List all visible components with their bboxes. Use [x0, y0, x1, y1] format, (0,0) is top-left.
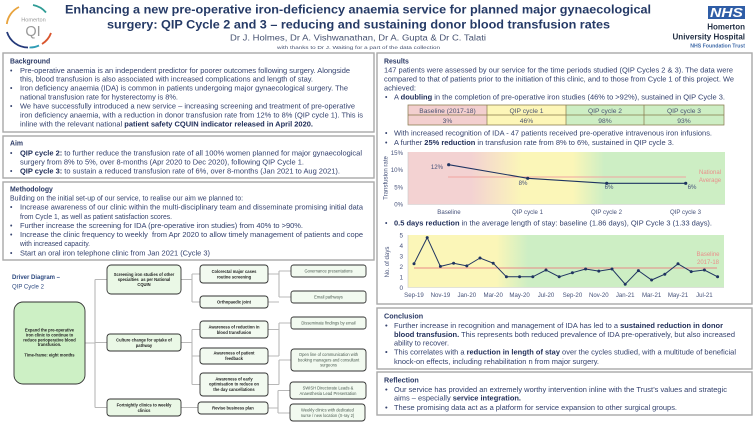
chart: length of stay: 5: [399, 232, 403, 240]
panel: reflection: [377, 372, 752, 415]
secondary driver: business plan: [198, 402, 268, 414]
logo: NHS Homerton University Hospital: University Hospital: [673, 32, 745, 41]
panel: background: iron deficiency anaemia, with a reduction in donor transfusion rate from 12% to 8% (QIP cycle 1). This is: [20, 112, 364, 119]
chart: transfusion rate: Baseline: [437, 209, 461, 216]
logo: NHS Homerton University Hospital: NHS: [710, 6, 744, 20]
length of stay line: [412, 236, 719, 286]
chart: transfusion rate: 6%: [605, 184, 614, 191]
panel: results: achieved:: [384, 86, 416, 93]
change idea: open line: booking managers and consultant: [298, 357, 360, 362]
secondary driver: business plan: Revise business plan: [212, 406, 254, 410]
change idea: disseminate: Disseminate findings by email: [301, 320, 356, 326]
panel: background: inline with the relevant national patient safety CQUIN indicator released in April 2020.: [20, 121, 313, 128]
panel: aim: surgery from 8% to 5%, over 8-months (Apr 2020 to Dec 2020), following QIP Cycle 1.: [20, 159, 304, 166]
chart: transfusion rate: [382, 150, 725, 216]
title: [65, 2, 651, 31]
chart: length of stay: No. of days: [384, 247, 391, 277]
primary driver: screening: Screening iron studies of other: [114, 272, 175, 277]
results table: 98%: [598, 118, 612, 125]
panel: conclusion: •: [385, 321, 388, 330]
chart: transfusion rate: 6%: [688, 184, 697, 191]
panel: methodology: Methodology: [10, 187, 53, 194]
driver: aim box: reduce perioperative blood: [23, 337, 76, 342]
x-axis month labels: Nov-19: [431, 292, 451, 299]
panel: methodology: from Cycle 1, as well as patient satisfaction scores.: [20, 214, 172, 221]
driver: aim box: transfusion.: [38, 342, 61, 347]
national average line: [448, 176, 686, 178]
chart: length of stay: [384, 232, 724, 299]
panel: aim: Aim: [10, 140, 23, 148]
panel: conclusion: •: [385, 348, 388, 357]
x-axis month labels: Mar-21: [642, 292, 662, 299]
chart: transfusion rate: QIP cycle 2: [591, 209, 623, 216]
chart: transfusion rate: QIP cycle 1: [512, 209, 544, 216]
change idea: open line: Open line of communication with: [299, 352, 359, 357]
panel: background: national transfusion rate for hysterectomy is 8%.: [20, 94, 178, 101]
change idea: open line: [291, 349, 366, 371]
title: surgery: QIP Cycle 2 and 3 – reducing and sustaining donor blood transfusion rates: [107, 17, 610, 31]
chart: length of stay: 0: [399, 285, 403, 292]
results table: Baseline (2017-18): [419, 108, 476, 115]
x-axis month labels: Jan-20: [457, 292, 477, 299]
panel: methodology: with increased capacity.: [19, 241, 90, 248]
change idea: open line: surgeons: [320, 363, 337, 368]
primary driver: clinic frequency: Fortnightly clinics to weekly: [117, 402, 172, 408]
panel: background: •: [10, 68, 13, 75]
panel: results: With increased recognition of IDA - 47 patients received pre-operative intravenous iron infusions.: [394, 130, 712, 138]
secondary driver: patient feedback: Awareness of patient: [213, 350, 255, 356]
chart: transfusion rate: 5%: [394, 184, 404, 191]
logo: Homerton QI: Homerton: [21, 18, 46, 24]
change idea: email: Email pathways: [314, 294, 343, 300]
x-axis month labels: Sep-19: [404, 292, 424, 299]
secondary driver: colorectal: Colorectal major cases: [212, 269, 257, 274]
logo: Homerton QI: QI: [25, 24, 41, 40]
transfusion rate line: [447, 163, 687, 185]
x-axis month labels: Sep-20: [563, 292, 583, 299]
driver diagram heading: QIP Cycle 2: [12, 284, 45, 290]
panel: results: •: [385, 94, 388, 102]
primary driver: screening: [107, 265, 181, 294]
baseline line: [414, 267, 717, 269]
results table: QIP cycle 1: [509, 108, 544, 115]
panel: aim: QIP cycle 2: to further reduce the transfusion rate of all 100% women planned for major gynaecological: [20, 150, 362, 157]
panel: conclusion: Conclusion: [384, 312, 423, 320]
logo: NHS Homerton University Hospital: Homerton: [707, 23, 745, 32]
chart: transfusion rate: 10%: [391, 167, 404, 174]
chart: transfusion rate: Transfusion rate: [382, 155, 390, 200]
secondary driver: early optimisation: the day cancellations: [213, 387, 255, 392]
chart: transfusion rate: 12%: [431, 164, 444, 171]
panel: background: Background: [10, 58, 50, 65]
logo: NHS Homerton University Hospital: NHS Foundation Trust: [690, 43, 745, 49]
panel: results: •: [385, 130, 388, 138]
panel: methodology: Building on the initial set-up of our service, to realise our aim we planned to:: [10, 196, 243, 203]
primary driver: screening: CQUIN: [137, 282, 151, 287]
x-axis month labels: Jul-20: [538, 292, 555, 299]
primary driver: culture change: Culture change for uptake of: [116, 338, 172, 342]
chart: transfusion rate: 15%: [391, 150, 404, 157]
panel: aim: •: [10, 150, 13, 157]
panel: results: A further 25% reduction in transfusion rate from 8% to 6%, sustained in QIP cycle 3.: [394, 140, 674, 147]
chart: length of stay: 2: [399, 264, 403, 271]
panel: results: Results: [384, 58, 409, 65]
results table: QIP cycle 2: [588, 108, 622, 115]
x-axis month labels: Nov-20: [589, 292, 609, 299]
panel: background: •: [10, 86, 13, 92]
secondary driver: early optimisation: [200, 373, 268, 396]
secondary driver: early optimisation: optimisation to reduce on: [209, 382, 260, 387]
chart: transfusion rate: 0%: [394, 202, 404, 209]
panel: aim: [3, 136, 374, 178]
driver diagram: [12, 265, 366, 421]
panel: methodology: Increase the clinic frequency to weekly from Apr 2020 to allow timely management of patients and cope: [20, 232, 363, 239]
panel: conclusion: This correlates with a reduction in length of stay over the cycles studied, with a multitude of beneficial: [394, 348, 736, 357]
panel: reflection: Reflection: [384, 376, 419, 385]
change idea: weekly clinics: [290, 404, 365, 421]
secondary driver: patient feedback: [200, 348, 268, 364]
panel: conclusion: [377, 308, 752, 369]
change idea: SWISH: [290, 382, 366, 399]
panel: conclusion: knock-on effects, including rehabilitation n from major surgery.: [394, 357, 599, 366]
x-axis month labels: Jan-21: [616, 292, 635, 299]
x-axis month labels: Mar-20: [484, 292, 503, 299]
driver diagram heading: Driver Diagram –: [12, 275, 61, 281]
chart: transfusion rate: National: [699, 170, 721, 176]
results table: [408, 105, 724, 125]
panel: results: •: [385, 220, 388, 228]
chart: length of stay: 2017-18: [697, 260, 720, 266]
panel: conclusion: Further increase in recognition and management of IDA has led to a sustained reduction in donor: [394, 321, 723, 330]
secondary driver: colorectal: [200, 265, 268, 283]
panel: results: •: [385, 140, 388, 147]
panel: reflection: Our service has provided an extremely worthy intervention inline with the Trust’s values and strategic: [394, 385, 727, 394]
change idea: governance: [291, 265, 366, 277]
secondary driver: colorectal: routine screening: [217, 274, 252, 280]
change idea: SWISH: SWISH Directorate Leads &: [303, 386, 354, 390]
panel: methodology: •: [10, 232, 13, 239]
panel: conclusion: blood transfusion. This represents both reduced prevalence of IDA pre-operatively, but also increased: [394, 330, 735, 339]
change idea: governance: Governance presentations: [304, 268, 353, 274]
driver diagram heading: [12, 275, 61, 290]
chart: transfusion rate: Average: [699, 178, 722, 184]
driver: aim box: iron clinic to continue to: [26, 332, 74, 337]
driver: aim box: Time-frame: eight months: [24, 352, 75, 358]
panel: background: this, blood transfusion is also associated with increased complications and length of stay.: [20, 76, 313, 84]
panel: methodology: Start an oral iron telephone clinic from Jan 2021 (Cycle 3): [20, 250, 210, 258]
driver: aim box: Expand the pre-operative: [25, 328, 75, 332]
primary driver: clinic frequency: clinics: [138, 408, 151, 413]
panel: background: Pre-operative anaemia is an independent predictor for poorer outcomes following surgery. Alongside: [20, 68, 350, 75]
panel: methodology: Further increase the screening for IDA (pre-operative iron studies) from 40% to >90%.: [20, 223, 303, 230]
panel: background: Iron deficiency anaemia (IDA) is common in patients undergoing major gynaecological surgery. The: [20, 86, 348, 92]
change idea: weekly clinics: Weekly clinics with dedicated: [301, 408, 355, 412]
change idea: disseminate: [291, 317, 366, 329]
chart: transfusion rate: 8%: [519, 180, 528, 187]
panel: conclusion: ability to recover.: [394, 339, 449, 348]
logo: Homerton QI: [7, 5, 51, 48]
change idea: SWISH: Anaesthesia Lead Presentation: [300, 391, 357, 396]
x-axis month labels: May-20: [509, 292, 530, 299]
panel: methodology: •: [10, 250, 13, 258]
panel: results: compared to that of patients prior to the initiation of this clinic, and to those from Cycle 1 of this project. We: [384, 77, 734, 84]
secondary driver: awareness of reduction: Awareness of reduction in: [208, 324, 260, 330]
x-axis month labels: Jul-21: [696, 292, 713, 299]
chart: length of stay: 1: [399, 274, 403, 281]
panel: aim: •: [10, 168, 13, 175]
panel: background: [3, 53, 374, 132]
secondary driver: orthopaedic: Orthopaedic joint: [217, 300, 252, 304]
chart: length of stay: 3: [399, 253, 403, 260]
secondary driver: patient feedback: feedback: [225, 356, 244, 361]
chart: length of stay: Baseline: [696, 252, 720, 258]
panel: results: 0.5 days reduction in the average length of stay: baseline (1.86 days), QIP Cycle 3 (1.33 days).: [394, 220, 712, 228]
secondary driver: orthopaedic: [200, 296, 268, 308]
driver: aim box: [14, 302, 85, 384]
panel: reflection: •: [385, 385, 388, 394]
primary driver: culture change: pathway: [136, 343, 153, 348]
results table: 93%: [677, 118, 691, 125]
panel: aim: QIP cycle 3: to sustain a reduced transfusion rate of 6%, over 8-months (Jan 2021 to Aug 2021).: [20, 168, 340, 175]
primary driver: screening: specialties as per National: [118, 277, 170, 282]
change idea: weekly clinics: nurse / new location (X-ray 2): [301, 413, 355, 418]
chart: transfusion rate: QIP cycle 3: [670, 209, 702, 216]
panel: reflection: •: [385, 403, 388, 412]
panel: methodology: •: [10, 223, 13, 230]
primary driver: culture change: [107, 334, 181, 351]
connectors: [85, 271, 291, 413]
x-axis month labels: [404, 292, 713, 299]
results table: 46%: [520, 118, 533, 125]
panel: methodology: Increase awareness of our clinic within the multi-disciplinary team and disseminate promising initial data: [20, 205, 363, 212]
authors: Dr J. Holmes, Dr A. Vishwanathan, Dr A. Gupta & Dr C. Talati: [230, 33, 486, 43]
primary driver: clinic frequency: [107, 399, 181, 416]
secondary driver: early optimisation: Awareness of early: [215, 376, 253, 382]
panel: reflection: aims – especially service integration.: [394, 394, 521, 403]
logo: NHS Homerton University Hospital: [673, 6, 745, 49]
panel: reflection: These promising data act as a platform for service expansion to other surgical groups.: [394, 403, 677, 412]
panel: methodology: [3, 182, 374, 260]
panel: methodology: •: [10, 205, 13, 212]
panel: results: 147 patients were assessed by our service for the time periods studied (QIP Cycles 2 & 3). The data were: [384, 68, 733, 75]
panel: results: A doubling in the completion of pre-operative iron studies (46% to >92%), sustained in QIP Cycle 3.: [394, 94, 725, 102]
panel: background: •: [10, 103, 13, 110]
results table: 3%: [443, 118, 452, 125]
panel: results: [377, 53, 752, 304]
chart: length of stay: 4: [399, 243, 403, 250]
secondary driver: awareness of reduction: [200, 321, 268, 338]
panel: background: We have successfully introduced a new service – increasing screening and treatment of pre-operative: [20, 103, 355, 110]
change idea: email: [291, 291, 366, 303]
x-axis month labels: May-21: [668, 292, 689, 299]
secondary driver: awareness of reduction: blood transfusion: [217, 330, 252, 335]
acknowledgement: with thanks to Dr J. Waiting for a part of the data collection: [277, 45, 441, 50]
results table: QIP cycle 3: [667, 108, 701, 115]
title: Enhancing a new pre-operative iron-deficiency anaemia service for planned major gynaecological: [65, 2, 651, 16]
